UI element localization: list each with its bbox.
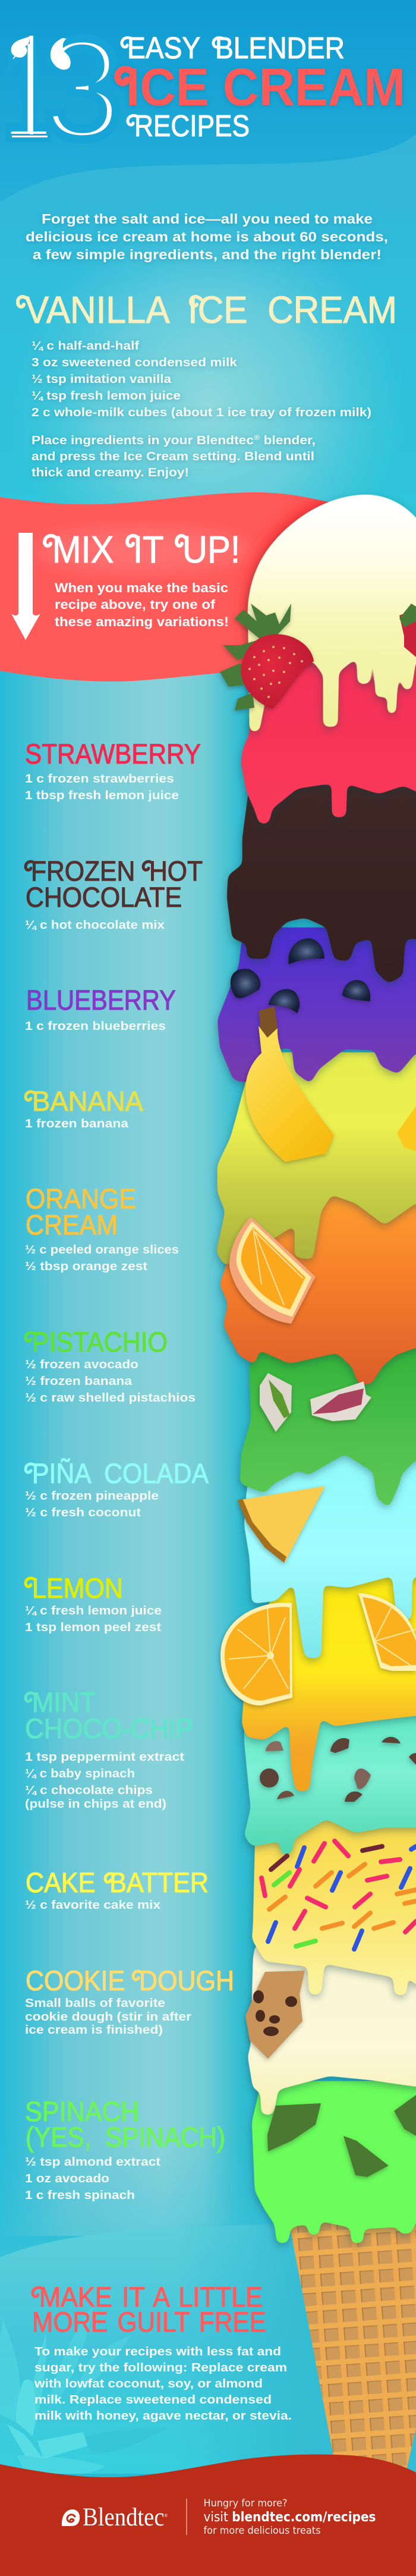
- banner text: [55, 580, 229, 629]
- recipe: frozen hot chocolate: FROZEN HOT: [31, 855, 203, 887]
- vanilla directions: ®: [254, 433, 260, 442]
- scoop: pina colada: [244, 1445, 416, 1658]
- recipe: frozen hot chocolate: CHOCOLATE: [26, 881, 182, 913]
- recipe: cake batter: CAKE BATTER: [26, 1867, 209, 1898]
- vanilla directions: [31, 433, 316, 479]
- recipe: cake batter: ½ c favorite cake mix: [25, 1899, 160, 1912]
- recipe: cookie dough: cookie dough (stir in after: [25, 2010, 191, 2024]
- recipe: orange cream: ½ tbsp orange zest: [25, 1260, 147, 1273]
- pistachios: [260, 1373, 371, 1432]
- vanilla ingredients list: 2 c whole-milk cubes (about 1 ice tray of frozen milk): [31, 406, 371, 419]
- guilt free paragraph: sugar, try the following: Replace cream: [34, 2361, 287, 2374]
- recipe: pina colada: [25, 1457, 209, 1519]
- banana right: [397, 1106, 416, 1151]
- blueberries: [231, 938, 370, 1013]
- recipe: lemon: LEMON: [32, 1572, 123, 1604]
- title numeral 13: [1, 9, 122, 169]
- scoop: orange: [220, 1195, 416, 1384]
- guilt free paragraph: [34, 2345, 292, 2423]
- heading: vanilla ice cream: VANILLA ICE CREAM: [25, 288, 397, 331]
- panel: guilt free background: [0, 2225, 416, 2474]
- recipe: lemon: 1 tsp lemon peel zest: [25, 1621, 161, 1634]
- title: [1, 9, 405, 169]
- recipe: strawberry: 1 tbsp fresh lemon juice: [25, 789, 179, 802]
- recipe: blueberry: BLUEBERRY: [26, 984, 176, 1016]
- recipe: spinach: ½ tsp almond extract: [25, 2156, 160, 2169]
- scoop: strawberry: [241, 648, 416, 824]
- intro paragraph: delicious ice cream at home is about 60 seconds,: [26, 229, 388, 244]
- icon: blendtec swirl logo: [62, 2509, 80, 2526]
- guilt free paragraph: with lowfat coconut, soy, or almond: [34, 2377, 263, 2390]
- sprinkles: [261, 1841, 416, 1949]
- footer call to action: Hungry for more?: [203, 2498, 288, 2509]
- recipe: orange cream: [25, 1183, 179, 1273]
- recipe: banana: BANANA: [32, 1085, 144, 1117]
- title line: easy blender: EASY BLENDER: [127, 31, 345, 65]
- icon: down arrow: [11, 533, 40, 640]
- vanilla ingredients list: [31, 340, 371, 419]
- guilt free paragraph: milk. Replace sweetened condensed: [34, 2393, 272, 2407]
- pineapple wedge: [238, 1486, 325, 1563]
- recipe: orange cream: ½ c peeled orange slices: [25, 1243, 179, 1256]
- heading: make it a little more guilt free: MAKE IT A LITTLE: [39, 2281, 263, 2313]
- scoop: pistachio: [240, 1344, 416, 1508]
- guilt free paragraph: milk with honey, agave nectar, or stevia.: [34, 2409, 292, 2423]
- scoop: cake batter: [252, 1814, 416, 1995]
- intro paragraph: Forget the salt and ice—all you need to make: [42, 211, 373, 227]
- recipe: banana: [25, 1085, 144, 1130]
- footer call to action: for more delicious treats: [203, 2525, 321, 2537]
- recipe: lemon: [25, 1572, 162, 1634]
- recipe: mint choco-chip: CHOCO-CHIP: [25, 1713, 193, 1744]
- vanilla ingredients list: ½ tsp imitation vanilla: [31, 373, 172, 386]
- recipe: strawberry: STRAWBERRY: [25, 738, 201, 769]
- recipe: mint choco-chip: 1 tsp peppermint extract: [25, 1751, 184, 1764]
- scoop: blueberry: [218, 928, 416, 1083]
- recipe: cookie dough: [25, 1965, 234, 2037]
- banner text: these amazing variations!: [55, 614, 229, 629]
- recipe: spinach: [25, 2096, 225, 2202]
- scoop: cookie dough: [248, 1944, 416, 2115]
- footer call to action: [203, 2498, 376, 2537]
- recipe: pistachio: [25, 1326, 196, 1405]
- vanilla directions: Place ingredients in your Blendtec: [31, 434, 226, 447]
- scoop: chocolate: [227, 785, 416, 984]
- recipe: banana: 1 frozen banana: [25, 1117, 129, 1130]
- vanilla directions: thick and creamy. Enjoy!: [31, 466, 189, 479]
- vanilla ingredients list: 3 oz sweetened condensed milk: [31, 356, 238, 369]
- spinach leaves: [267, 2095, 416, 2177]
- orange slice: [229, 1217, 316, 1324]
- guilt free paragraph: To make your recipes with less fat and: [34, 2345, 281, 2358]
- scoop: lemon: [238, 1570, 416, 1791]
- vanilla directions: and press the Ice Cream setting. Blend until: [31, 450, 314, 463]
- recipe: mint choco-chip: ¼ c chocolate chips: [25, 1784, 153, 1797]
- recipe: cookie dough: ice cream is finished): [25, 2024, 163, 2037]
- footer call to action: visit blendtec.com/recipes: [203, 2510, 376, 2525]
- illustration: ice cream cone: [216, 495, 416, 2480]
- waffle cone: [291, 2222, 416, 2468]
- recipe: spinach: 1 c fresh spinach: [25, 2189, 135, 2202]
- recipe: spinach: 1 oz avocado: [25, 2172, 109, 2185]
- strawberry fruit right: [399, 604, 416, 657]
- recipe: pistachio: ½ c raw shelled pistachios: [25, 1391, 196, 1405]
- banner text: When you make the basic: [55, 580, 228, 595]
- title numeral 13: 1: [1, 10, 53, 169]
- recipe: spinach: SPINACH: [25, 2096, 139, 2127]
- recipe: cake batter: [25, 1867, 209, 1912]
- scoop: vanilla: [248, 495, 416, 731]
- vanilla ingredients list: ¼ c half-and-half: [31, 340, 139, 353]
- recipe: strawberry: [25, 738, 201, 802]
- intro paragraph: [26, 211, 388, 262]
- scoop: spinach: [252, 2081, 416, 2243]
- recipe: orange cream: ORANGE: [26, 1183, 136, 1214]
- recipe: blueberry: [25, 984, 176, 1033]
- illustration: agave plant: [0, 2305, 168, 2474]
- heading: make it a little more guilt free: MORE GUILT FREE: [32, 2306, 266, 2338]
- recipe: pina colada: ½ c frozen pineapple: [25, 1490, 159, 1503]
- heading: make it a little more guilt free: [32, 2281, 266, 2338]
- recipe: mint choco-chip: MINT: [32, 1686, 96, 1718]
- recipe: orange cream: CREAM: [26, 1209, 118, 1240]
- recipe: strawberry: 1 c frozen strawberries: [25, 772, 174, 786]
- lemon slices: [220, 1593, 416, 1705]
- recipe: pistachio: PISTACHIO: [32, 1326, 168, 1358]
- recipe: mint choco-chip: ¼ c baby spinach: [25, 1767, 135, 1780]
- title line: ice cream: ICE CREAM: [126, 57, 405, 117]
- recipe: spinach: (YES, SPINACH): [26, 2121, 225, 2153]
- cookie: [245, 1971, 305, 2059]
- recipe: mint choco-chip: [25, 1686, 193, 1811]
- recipe: pina colada: PIÑA COLADA: [32, 1457, 209, 1489]
- recipe: pistachio: ½ frozen banana: [25, 1375, 133, 1388]
- recipe: blueberry: 1 c frozen blueberries: [25, 1020, 166, 1033]
- banana: [245, 1006, 334, 1162]
- heading: mix it up: MIX IT UP!: [52, 528, 240, 571]
- illustration: fruit and toppings: [220, 604, 416, 2177]
- strawberry fruit: [220, 604, 314, 711]
- recipe: cookie dough: Small balls of favorite: [25, 1997, 165, 2010]
- logo wordmark: Blendtec: [83, 2503, 174, 2531]
- header wave: [0, 0, 416, 202]
- intro paragraph: a few simple ingredients, and the right blender!: [33, 247, 382, 262]
- chocolate chips: [260, 1737, 416, 1802]
- logo wordmark: ®: [165, 2513, 168, 2518]
- banner text: recipe above, try one of: [55, 597, 216, 612]
- panel: footer: [0, 2455, 416, 2576]
- recipe: lemon: ¼ c fresh lemon juice: [25, 1604, 162, 1617]
- panel: mix it up banner: [0, 492, 329, 681]
- scoop: mint: [244, 1713, 416, 1854]
- recipe: frozen hot chocolate: [25, 855, 203, 932]
- recipe: pistachio: ½ frozen avocado: [25, 1358, 138, 1371]
- vanilla directions: blender,: [260, 434, 316, 447]
- title line: recipes: RECIPES: [134, 109, 250, 143]
- recipe: mint choco-chip: (pulse in chips at end): [25, 1798, 166, 1811]
- scoop: banana: [216, 1053, 416, 1266]
- recipe: frozen hot chocolate: ¼ c hot chocolate mix: [25, 919, 165, 932]
- recipe: pina colada: ½ c fresh coconut: [25, 1506, 141, 1519]
- title numeral 13: 3: [43, 9, 122, 168]
- vanilla ingredients list: ¼ tsp fresh lemon juice: [31, 389, 181, 403]
- recipe: cookie dough: COOKIE DOUGH: [26, 1965, 234, 1996]
